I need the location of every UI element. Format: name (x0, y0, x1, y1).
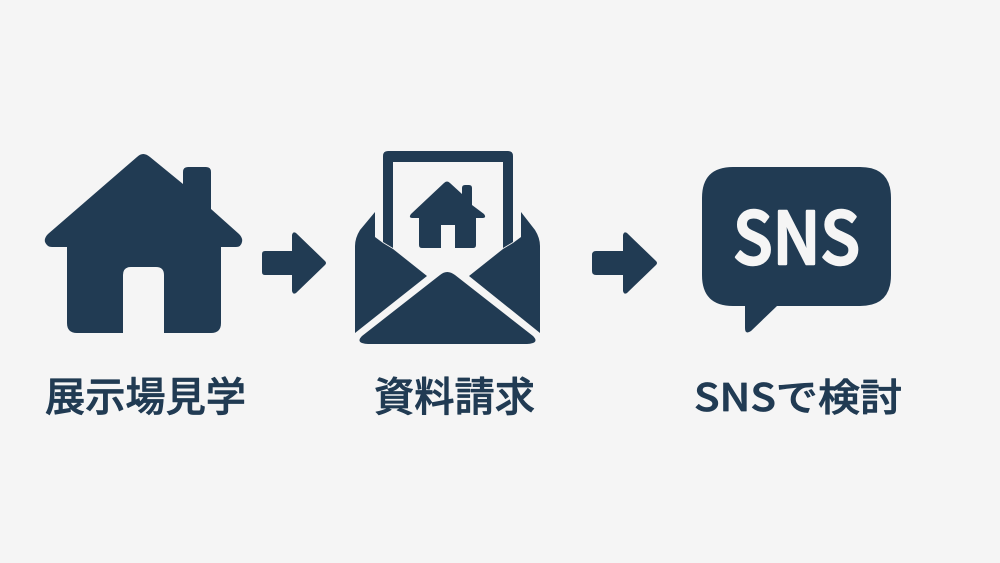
icon: envelope with document (355, 151, 540, 344)
envelope front flap (360, 272, 536, 344)
icon: house (45, 154, 242, 333)
envelope right side (469, 212, 540, 333)
document frame (383, 151, 513, 248)
bubble text: SNS (733, 180, 860, 285)
arrow: step 2 to step 3 (592, 232, 657, 294)
small house on document (410, 182, 485, 248)
label: showroom visit: 展示場見学 (45, 364, 246, 423)
label: request brochure: 資料請求 (374, 364, 535, 423)
envelope left side (355, 212, 427, 333)
label: consider on SNS: SNSで検討 (694, 367, 902, 422)
icon: SNS speech bubble (702, 167, 891, 332)
arrow: step 1 to step 2 (262, 232, 326, 294)
